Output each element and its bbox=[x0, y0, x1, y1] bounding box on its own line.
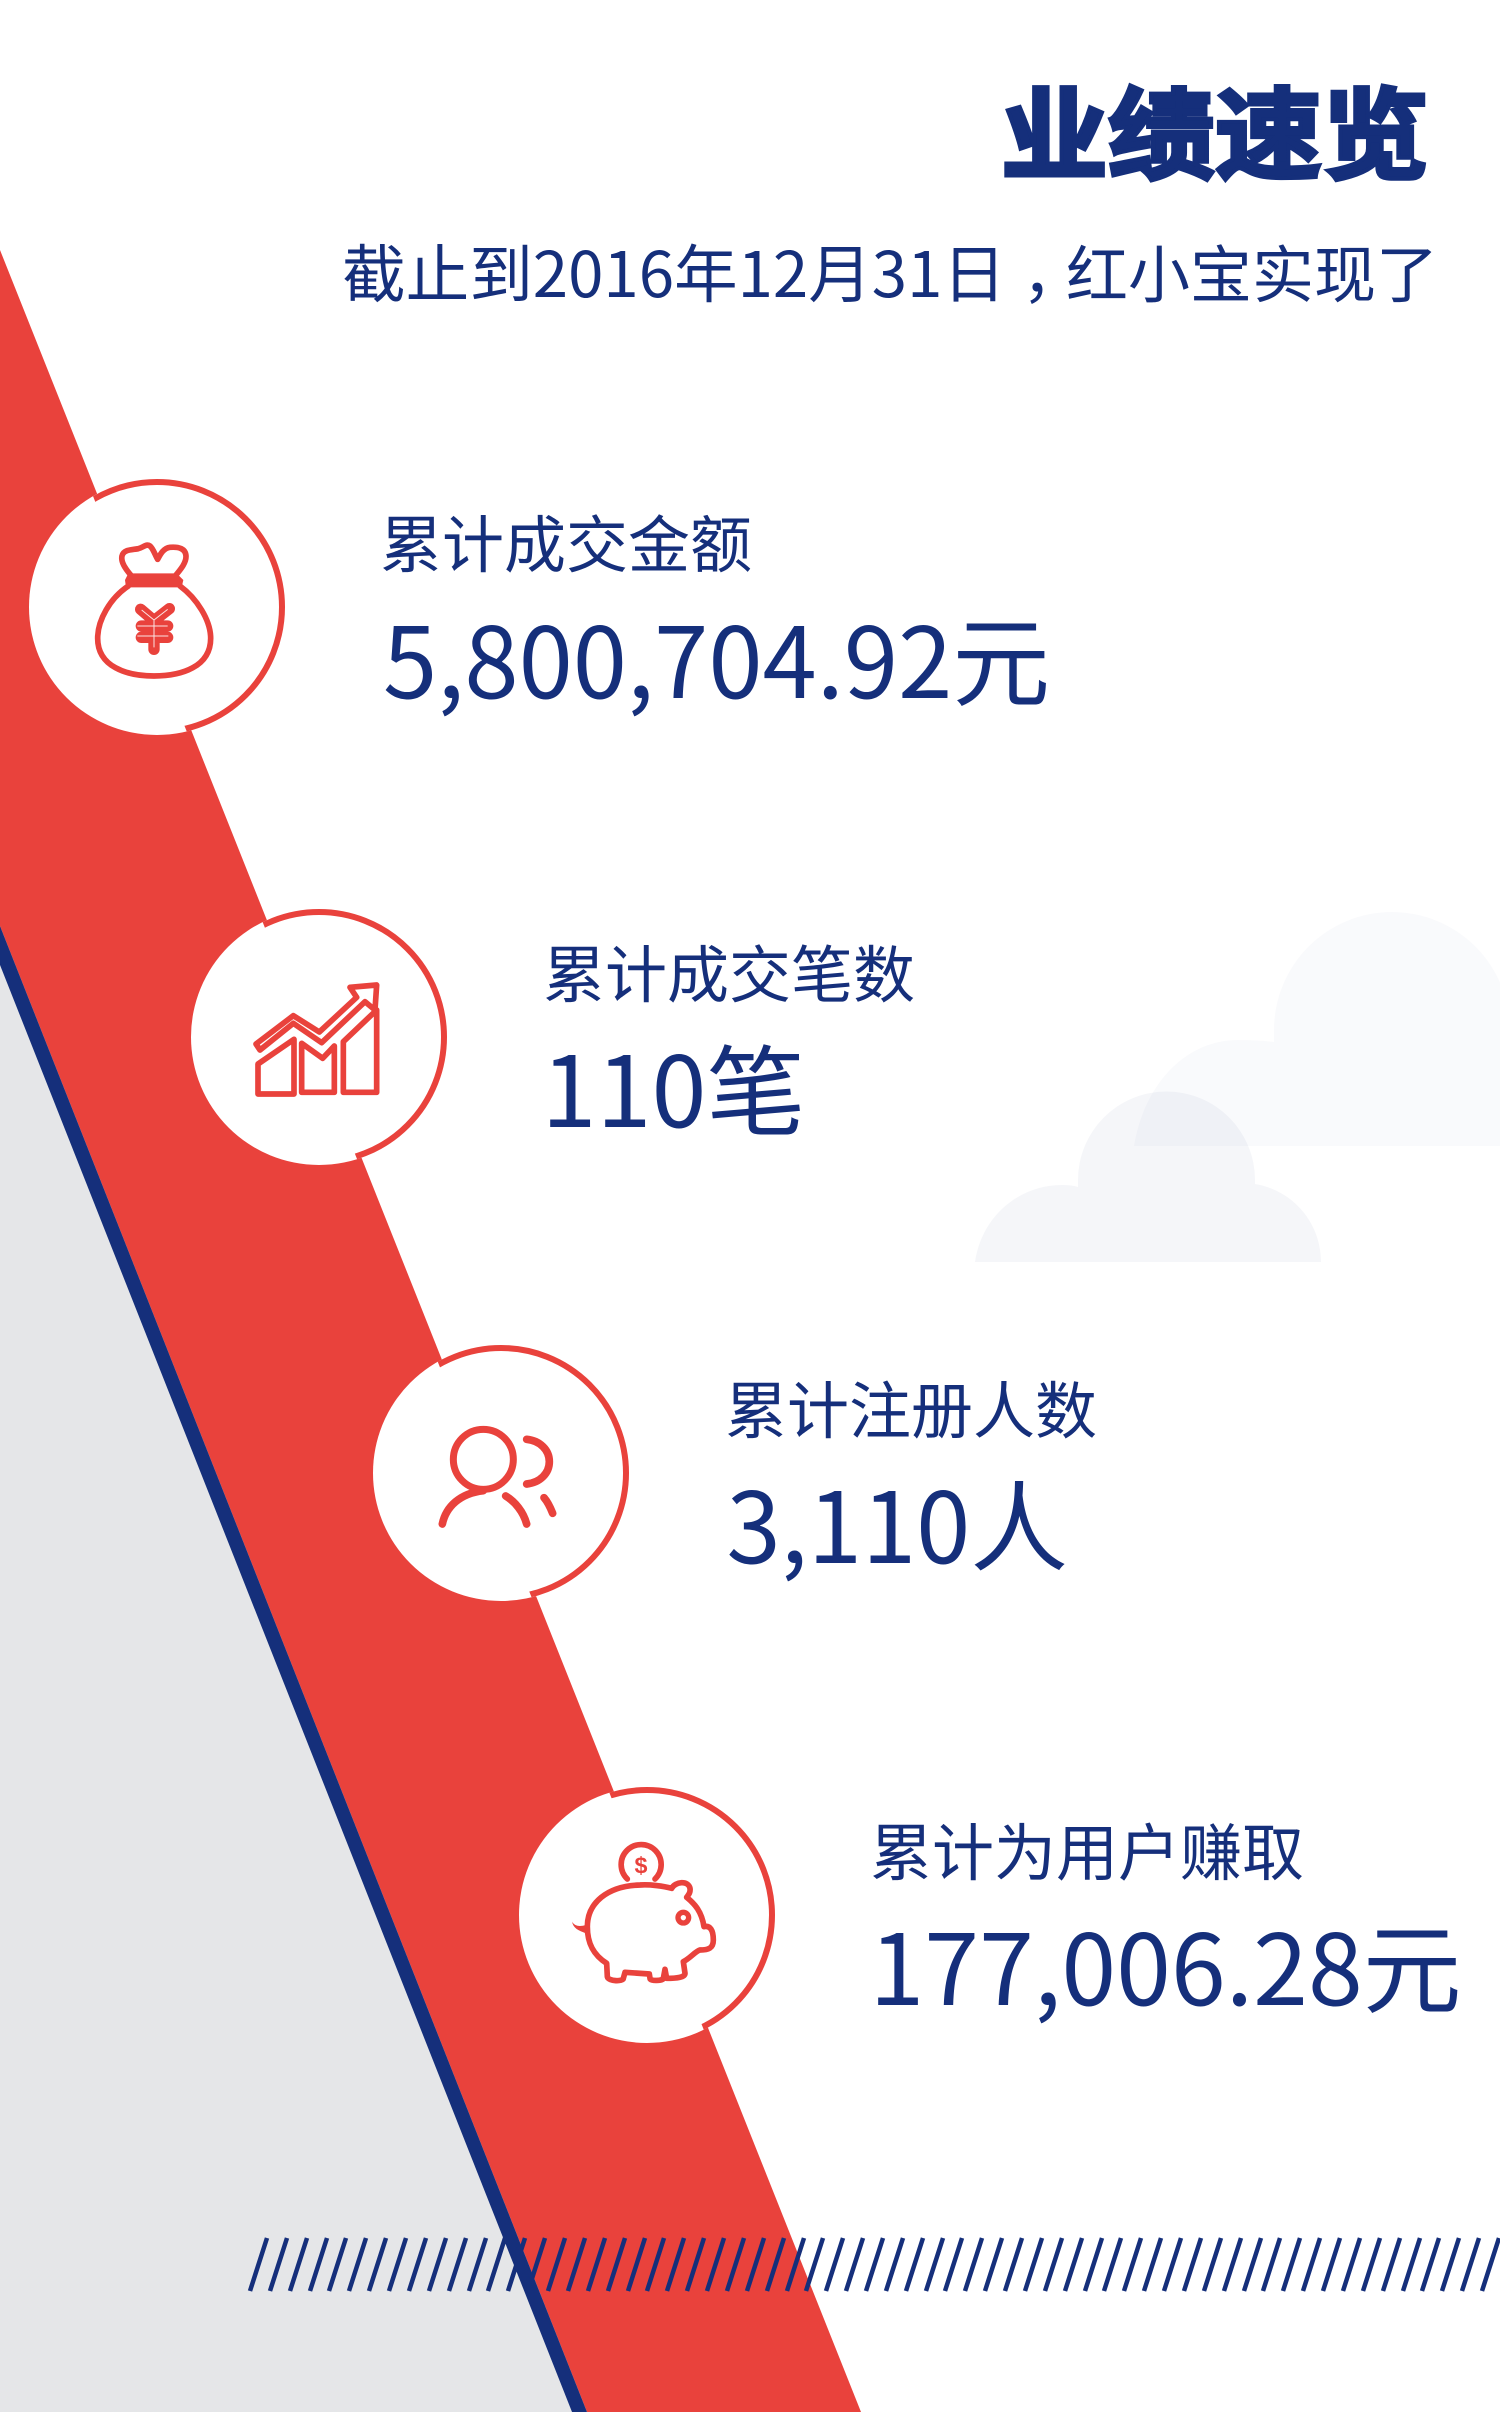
panel: total transaction amount bbox=[29, 479, 1050, 735]
label: 累计成交金额 bbox=[380, 495, 752, 585]
subtitle: ， bbox=[1022, 225, 1084, 315]
value: 3,110人 bbox=[726, 1450, 1068, 1592]
diagonal red band bbox=[0, 250, 861, 2412]
icon: money bag bbox=[98, 545, 211, 676]
value: 177,006.28元 bbox=[870, 1892, 1462, 2034]
icon: users bbox=[442, 1429, 553, 1524]
label: 累计成交笔数 bbox=[543, 925, 915, 1015]
subtitle bbox=[342, 225, 1438, 316]
panel: total transaction count bbox=[191, 909, 915, 1165]
title: 业绩速览 bbox=[1001, 55, 1429, 200]
circle badge: money bag bbox=[29, 479, 285, 735]
subtitle: 红小宝实现了 bbox=[1066, 225, 1438, 315]
label: 累计为用户赚取 bbox=[870, 1803, 1304, 1893]
circle badge: piggy bank bbox=[519, 1787, 775, 2043]
panel: total user earnings bbox=[519, 1787, 1462, 2043]
circle badge: growth chart bbox=[191, 909, 447, 1165]
value: 5,800,704.92元 bbox=[383, 585, 1050, 727]
label: 累计注册人数 bbox=[725, 1361, 1097, 1451]
panel: total registered users bbox=[373, 1345, 1097, 1601]
icon: piggy bank bbox=[572, 1845, 713, 1981]
hatch stripe bbox=[250, 2238, 1499, 2291]
value: 110笔 bbox=[542, 1014, 806, 1156]
diagonal navy stripe bbox=[0, 926, 587, 2412]
icon: piggy bank: $ bbox=[635, 1852, 648, 1878]
diagonal grey area bbox=[0, 965, 572, 2412]
icon: growth chart bbox=[256, 985, 377, 1094]
circle badge: users bbox=[373, 1345, 629, 1601]
subtitle: 截止到2016年12月31日 bbox=[342, 225, 1006, 316]
clouds bbox=[975, 912, 1500, 1262]
